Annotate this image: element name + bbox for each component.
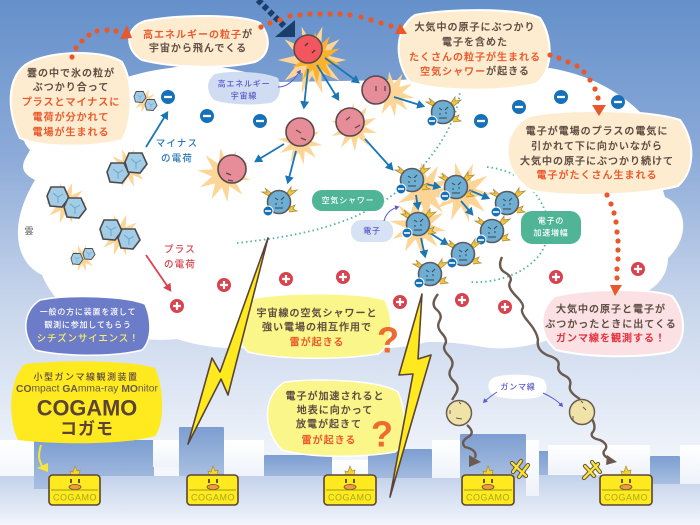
question mark 2: ? — [371, 414, 393, 454]
callout: high energy particle: 宇宙から飛んでくる — [149, 42, 247, 54]
label: acceleration — [521, 211, 581, 244]
gamma particle 1 — [446, 400, 472, 426]
gamma ray 2 lower — [592, 419, 617, 465]
callout: air shower: 大気中の原子にぶつかり — [414, 20, 536, 34]
icon: detector 4 — [462, 466, 514, 505]
question mark 1: ? — [377, 320, 399, 360]
bursts — [193, 27, 494, 258]
icon: detector 5 — [600, 466, 652, 505]
callout: gamma rays — [484, 375, 562, 406]
callout: cosmic ray + electric field: 宇宙線の空気シャワーと — [256, 306, 378, 320]
ground — [0, 475, 700, 525]
icon: signal mark 1 — [512, 461, 528, 477]
ice crystals — [45, 89, 157, 271]
cosmic ray arrow — [258, 0, 295, 37]
positive charges — [170, 262, 645, 314]
particles: secondary — [218, 76, 390, 183]
label: electron — [351, 207, 398, 242]
callout: observe gamma rays: ガンマ線を観測する！ — [556, 332, 666, 344]
label: positive charge: プラス — [164, 244, 196, 256]
label: positive charge — [164, 244, 196, 270]
orange dotted path — [69, 11, 622, 296]
callout: observe gamma rays — [542, 290, 683, 356]
callout: electron discharge: 雷が起きる — [302, 434, 356, 446]
callout: electrons multiply: 引かれて下に向かいながら — [531, 140, 663, 152]
arrow: positive — [146, 255, 170, 290]
label: negative charge: マイナス — [156, 138, 198, 150]
label: acceleration: 加速増幅 — [533, 228, 569, 238]
callout: high-energy cosmic ray: 宇宙線 — [231, 90, 257, 100]
callout: citizen science: シチズンサイエンス！ — [37, 332, 139, 344]
arrow: COGAMO pointer — [37, 445, 48, 472]
callout: electron discharge: 地表に向かって — [297, 404, 373, 416]
callout: high energy particle: 高エネルギーの粒子が — [143, 28, 253, 40]
callout: electron discharge — [267, 380, 404, 456]
callout: air shower: 電子を含めた — [442, 36, 508, 48]
icon: detector 5: COGAMO — [604, 492, 648, 502]
panel: COGAMO description: コガモ — [60, 420, 114, 438]
callout: ice collision: 雲の中で氷の粒が — [27, 66, 115, 80]
callout: electrons multiply: 大気中の原子にぶつかり続けて — [520, 154, 674, 168]
callout: observe gamma rays: ぶつかったときに出てくる — [545, 318, 677, 330]
label: negative charge: の電荷 — [161, 152, 193, 164]
lightning left — [188, 238, 268, 444]
panel: COGAMO description: 小型ガンマ線観測装置 — [33, 371, 139, 382]
callout: high-energy cosmic ray — [208, 71, 300, 104]
gamma particle 2 — [570, 400, 594, 424]
callout: ice collision — [11, 53, 131, 146]
callout: citizen science — [26, 297, 150, 355]
callout: air shower: たくさんの粒子が生まれる — [409, 50, 541, 64]
cloud — [18, 65, 683, 349]
gamma ray 1 lower — [463, 425, 481, 467]
icon: detector 1 — [49, 466, 100, 505]
callout: citizen science: 観測に参加してもらう — [44, 320, 132, 330]
particle: primary cosmic ray — [294, 35, 322, 63]
callout: electrons multiply: 電子が電場のプラスの電気に — [526, 124, 668, 138]
icon: detector 4: COGAMO — [466, 492, 510, 502]
electron arrows — [256, 58, 488, 256]
gamma ray 2 — [500, 257, 580, 399]
lightning right — [390, 294, 431, 497]
callout: electrons multiply: 電子がたくさん生まれる — [536, 168, 658, 182]
icon: detector 2 — [187, 466, 238, 505]
label: positive charge: の電荷 — [164, 258, 196, 270]
callout: cosmic ray + electric field: 強い電場の相互作用で — [262, 320, 372, 334]
panel: COGAMO description — [11, 361, 162, 443]
callout: observe gamma rays: 大気中の原子と電子が — [556, 302, 666, 316]
icon: detector 3: COGAMO — [328, 492, 372, 502]
callout: high energy particle — [129, 16, 268, 67]
gamma ray 1 — [434, 294, 458, 400]
callout: ice collision: プラスとマイナスに — [22, 96, 120, 108]
callout: air shower: 空気シャワーが起きる — [420, 64, 530, 78]
callout: cosmic ray + electric field — [238, 294, 391, 358]
city buildings — [0, 427, 700, 500]
icon: detector 3 — [324, 466, 376, 505]
panel: COGAMO description: COmpact GAmma-ray MOnitor — [16, 384, 159, 394]
label: air shower — [312, 190, 384, 211]
icon: detector 1: COGAMO — [53, 492, 97, 502]
callout: citizen science: 一般の方に装置を渡して — [40, 306, 136, 316]
label: air shower: 空気シャワー — [322, 195, 374, 205]
callout: high-energy cosmic ray: 高エネルギー — [218, 78, 270, 88]
icon: detector 2: COGAMO — [191, 492, 235, 502]
icon: signal mark 2 — [584, 462, 600, 478]
panel: COGAMO description: COGAMO — [37, 396, 137, 420]
electrons — [262, 97, 525, 288]
arrow: negative — [146, 113, 167, 147]
label: cloud: 雲 — [24, 226, 34, 236]
label: negative charge — [156, 138, 198, 164]
callout: electron discharge: 電子が加速されると — [286, 390, 384, 402]
callout: gamma rays: ガンマ線 — [500, 382, 536, 392]
callout: air shower — [399, 10, 550, 90]
callout: cosmic ray + electric field: 雷が起きる — [290, 336, 344, 348]
callout: ice collision: ぶつかり合って — [33, 80, 109, 94]
callout: ice collision: 電場が生まれる — [32, 126, 110, 138]
callout: electron discharge: 放電が起きて — [296, 418, 362, 430]
green dotted lines — [237, 92, 547, 282]
label: acceleration: 電子の — [538, 216, 564, 226]
label: electron: 電子 — [363, 226, 381, 236]
callout: electrons multiply — [508, 111, 691, 195]
callout: ice collision: 電荷が分かれて — [33, 110, 109, 124]
negative charges — [161, 90, 625, 128]
